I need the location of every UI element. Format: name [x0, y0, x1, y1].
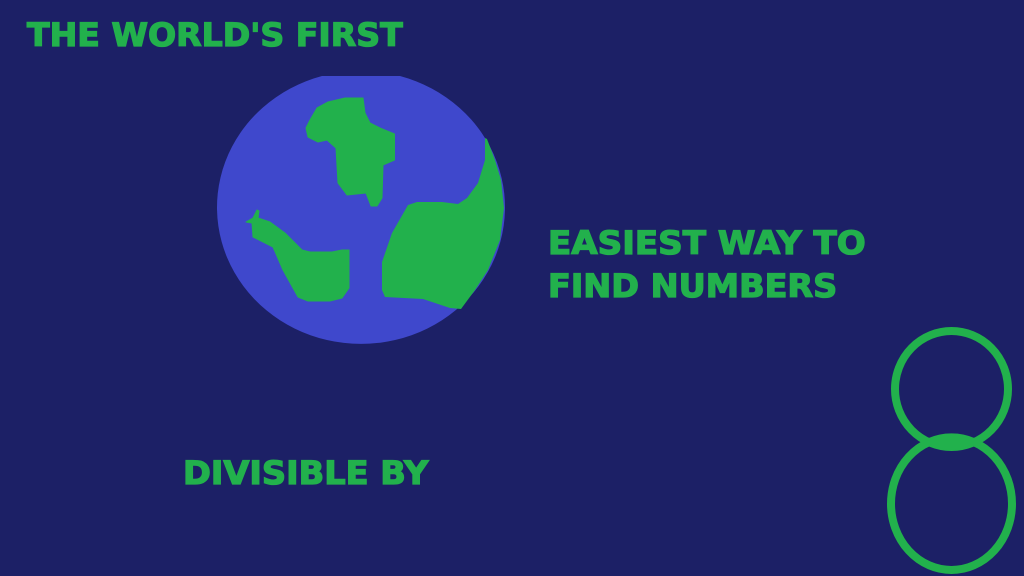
text: divisible by: DIVISIBLE BY [183, 454, 428, 492]
numeral 8 [891, 331, 1012, 570]
continent: top [306, 98, 394, 206]
text: easiest way to find numbers: EASIEST WAY TO [548, 224, 866, 262]
text: easiest way to find numbers [548, 224, 866, 305]
globe [217, 76, 505, 344]
continent: right [382, 138, 504, 309]
continent: left [246, 210, 349, 301]
title: the world's first: THE WORLD'S FIRST [27, 16, 403, 54]
text: easiest way to find numbers: FIND NUMBERS [548, 267, 837, 305]
